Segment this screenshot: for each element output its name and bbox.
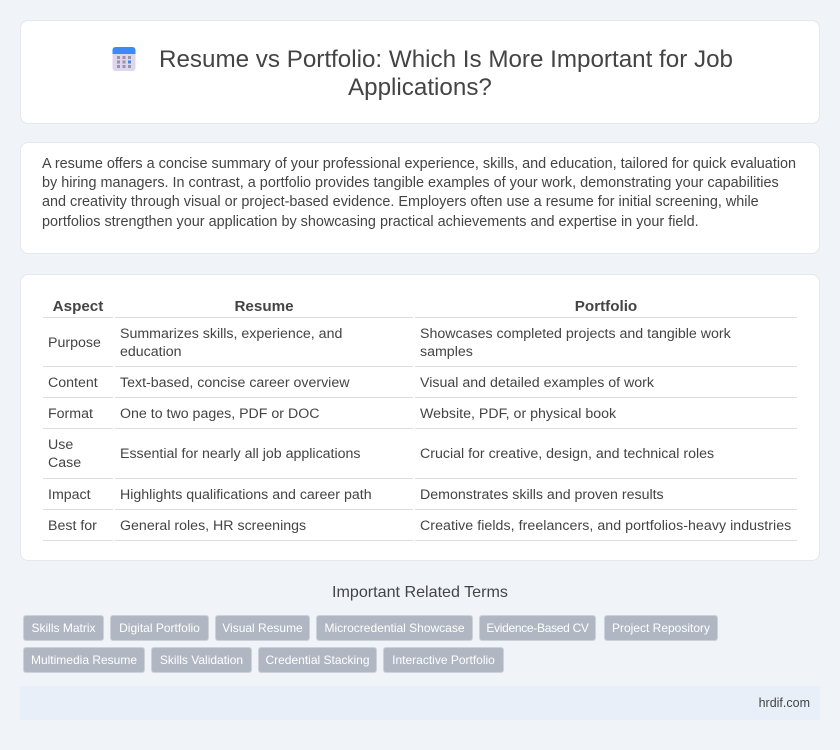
row: content: [48, 375, 654, 391]
row: purpose: education: [120, 344, 182, 360]
row: format: Format: [48, 406, 93, 422]
tag: Credential Stacking: [265, 653, 370, 667]
table header row: Resume: [234, 298, 294, 315]
row: content: Text-based, concise career overview: [120, 375, 349, 391]
tag: Interactive Portfolio: [392, 653, 495, 667]
header card: [20, 20, 820, 124]
title: [159, 46, 733, 101]
row: use case: [48, 437, 714, 471]
table header row: Aspect: [53, 298, 103, 315]
row: content: Content: [48, 375, 98, 391]
icon: calendar: [112, 47, 136, 71]
tag: Project Repository: [612, 621, 710, 635]
title: Applications?: [348, 74, 492, 101]
row: use case: Use: [48, 437, 73, 453]
row: format: One to two pages, PDF or DOC: [120, 406, 320, 422]
table header row: [53, 298, 637, 315]
tag: Microcredential Showcase: [324, 621, 465, 635]
tag: [604, 615, 718, 641]
row: best for: Creative fields, freelancers, and portfolios-heavy industries: [420, 518, 791, 534]
rules: [43, 317, 113, 318]
row: format: Website, PDF, or physical book: [420, 406, 616, 422]
table header row: Portfolio: [575, 298, 637, 315]
row: impact: [48, 487, 664, 503]
tag: Visual Resume: [222, 621, 303, 635]
row: impact: Impact: [48, 487, 91, 503]
row: purpose: [48, 326, 731, 360]
tag: Digital Portfolio: [119, 621, 200, 635]
tag: [110, 615, 209, 641]
footer bar: [20, 686, 820, 720]
tag: [23, 615, 104, 641]
footer source text: hrdif.com: [759, 696, 810, 710]
tag: Evidence-Based CV: [486, 621, 589, 635]
row: best for: Best for: [48, 518, 97, 534]
row: use case: Essential for nearly all job applications: [120, 446, 361, 462]
intro paragraph: by hiring managers. In contrast, a portfolio provides tangible examples of your work, demonstrating your capabilities: [42, 175, 779, 191]
intro paragraph: and creativity through visual or project-based evidence. Employers often use a resume for initial screening, while: [42, 194, 759, 210]
intro paragraph: portfolios strengthen your application by showcasing practical achievements and expertise in your field.: [42, 214, 699, 230]
row: impact: Demonstrates skills and proven results: [420, 487, 664, 503]
tag: Multimedia Resume: [31, 653, 137, 667]
row: purpose: Summarizes skills, experience, and: [120, 326, 342, 342]
row: impact: Highlights qualifications and career path: [120, 487, 372, 503]
row: use case: Case: [48, 455, 81, 471]
tag: [215, 615, 310, 641]
row: format: [48, 406, 616, 422]
row: best for: General roles, HR screenings: [120, 518, 306, 534]
intro paragraph: [42, 156, 796, 230]
tag: [383, 647, 504, 673]
tag: [151, 647, 252, 673]
related terms heading: Important Related Terms: [332, 583, 508, 601]
row: best for: [48, 518, 791, 534]
tag: [479, 615, 596, 641]
row: purpose: Purpose: [48, 335, 101, 351]
tag: [23, 647, 145, 673]
related term tags: [23, 615, 718, 673]
intro paragraph: A resume offers a concise summary of your professional experience, skills, and education, tailored for quick evaluation: [42, 156, 796, 172]
intro text panel: [20, 142, 820, 254]
row: purpose: samples: [420, 344, 473, 360]
tag: [316, 615, 473, 641]
comparison table panel: [20, 274, 820, 561]
title: Resume vs Portfolio: Which Is More Important for Job: [159, 46, 733, 73]
row: purpose: Showcases completed projects and tangible work: [420, 326, 731, 342]
tag: Skills Validation: [160, 653, 243, 667]
tag: Skills Matrix: [31, 621, 96, 635]
tag: [258, 647, 377, 673]
row: content: Visual and detailed examples of work: [420, 375, 654, 391]
row: use case: Crucial for creative, design, and technical roles: [420, 446, 714, 462]
